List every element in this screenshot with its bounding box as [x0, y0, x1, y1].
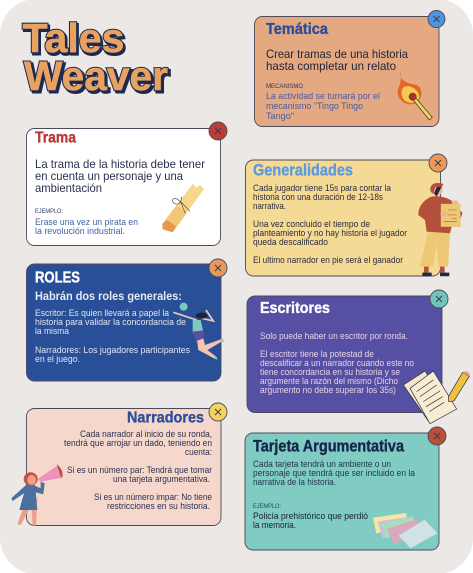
text: Tarjeta body [253, 459, 416, 487]
text: Narradores body: una tarjeta argumentativa. [113, 474, 210, 484]
text: Escritores body: El escritor tiene la potestad de [260, 349, 374, 359]
text: Trama example: Erase una vez un pirata en [35, 217, 138, 227]
text: Generalidades body: Cada jugador tiene 15s para contar la [253, 183, 392, 193]
text: Narradores body: Si es un número par: Tendrá que tomar [67, 465, 212, 475]
title: Tales [22, 15, 125, 61]
text: Trama example: la revolución industrial. [35, 226, 125, 236]
text: Escritores body: Solo puede haber un escritor por ronda. [260, 331, 408, 341]
text: Tarjeta example: EJEMPLO: [253, 503, 281, 510]
text: mecanismo: mecanismo "Tingo Tingo [266, 101, 363, 111]
icon: person reading paper [418, 183, 463, 276]
icon: volleyball player [173, 303, 225, 360]
text: Tarjeta body: narrativa de la historia. [253, 477, 336, 487]
text: Temática body: Crear tramas de una historia [266, 47, 408, 61]
title: Weaver [24, 53, 168, 99]
text: Generalidades body: El ultimo narrador en pie será el ganador [253, 255, 403, 265]
heading: Tarjeta Argumentativa: Tarjeta Argumentativa [253, 438, 405, 456]
icon: close button orange [429, 154, 447, 172]
text: Generalidades body [253, 183, 407, 265]
text: Narradores body: restricciones en su historia. [107, 501, 210, 511]
text: Generalidades body: planteamiento y no hay historia el jugador [253, 228, 407, 238]
icon: close button teal [430, 290, 448, 308]
panel: Escritores [247, 290, 470, 424]
icon: argument cards [373, 513, 437, 548]
heading: Trama: Trama [35, 130, 76, 146]
text: roles body: en el juego. [35, 354, 80, 364]
text: mecanismo: Tango" [266, 111, 294, 121]
panel: Trama [26, 122, 227, 246]
text: roles body: historia para validar la concordancia de [35, 317, 186, 327]
text: Trama example: EJEMPLO: [35, 208, 63, 215]
subheading: roles: Habrán dos roles generales: [35, 291, 182, 303]
text: Tarjeta body: personaje que tendrá que ser incluido en la [253, 468, 416, 478]
text: Trama body: en cuenta un personaje y una [35, 169, 183, 183]
icon: close button red [209, 122, 227, 140]
heading: ROLES: ROLES [35, 270, 80, 286]
text: Generalidades body: historia con una duración de 12-18s [253, 192, 383, 202]
text: Narradores body: Cada narrador al inicio de su ronda, [80, 429, 212, 439]
icon: close button yellow [209, 403, 227, 421]
text: Generalidades body: Una vez concluido el tiempo de [253, 219, 370, 229]
text: Narradores body [64, 429, 212, 511]
text: mecanismo: MECANISMO [266, 83, 303, 90]
icon: close button orange [209, 259, 227, 277]
icon: papers and pencil [403, 371, 470, 424]
text: mecanismo [266, 83, 380, 121]
title [22, 15, 170, 101]
text: Generalidades body: queda descalificado [253, 237, 328, 247]
text: Trama body: ambientación [35, 181, 102, 195]
text: Tarjeta example [253, 503, 368, 530]
title: Weaver [24, 53, 168, 99]
icon: woman with megaphone [11, 464, 63, 526]
title: Weaver [26, 55, 170, 101]
text: Temática body: hasta completar un relato [266, 59, 396, 73]
text: Escritores body: argumento no debe superar los 35s) [260, 385, 396, 395]
panel: ROLES [26, 259, 227, 381]
text: Trama body: La trama de la historia debe tener [35, 157, 205, 171]
heading: Temática: Temática [266, 21, 328, 38]
text: Generalidades body: narrativa. [253, 201, 286, 211]
panel: Temática [254, 10, 445, 126]
title: Tales [22, 15, 125, 61]
text: Escritores body [260, 331, 414, 395]
text: roles body [35, 308, 190, 364]
heading: Generalidades: Generalidades [253, 162, 353, 180]
text: mecanismo: La actividad se turnará por el [266, 91, 380, 101]
text: Trama body [35, 157, 205, 195]
heading: Narradores: Narradores [127, 410, 204, 426]
text: Tarjeta example: Policía prehistórico que perdió [253, 511, 368, 521]
panel: Tarjeta Argumentativa [245, 427, 446, 550]
icon: close button dark red [428, 427, 446, 445]
text: Escritores body: argumente la razón del mismo (Dicho [260, 376, 398, 386]
icon: burning match [398, 72, 432, 120]
text: roles body: Narradores: Los jugadores participantes [35, 345, 190, 355]
text: Tarjeta example: la memoria. [253, 520, 296, 530]
text: roles body: Escritor: Es quien llevará a papel la [35, 308, 170, 318]
text: Narradores body: Si es un número impar: No tiene [94, 492, 212, 502]
icon: close button blue [428, 10, 445, 28]
panel: Narradores [11, 403, 227, 526]
text: Narradores body: cuenta: [185, 447, 212, 457]
heading: Escritores: Escritores [260, 300, 330, 317]
panel: Generalidades [246, 154, 463, 276]
text: Escritores body: tiene concordancia en su historia y se [260, 367, 400, 377]
icon: scroll [162, 184, 204, 232]
text: Escritores body: descalificar a un narrador cuando este no [260, 358, 414, 368]
text: Tarjeta body: Cada tarjeta tendrá un ambiente o un [253, 459, 391, 469]
text: Trama example [35, 208, 138, 236]
text: roles body: la misma [35, 326, 70, 336]
text: Narradores body: tendrá que arrojar un dado, teniendo en [64, 438, 212, 448]
title: Tales [24, 17, 126, 63]
text: Temática body [266, 47, 408, 73]
